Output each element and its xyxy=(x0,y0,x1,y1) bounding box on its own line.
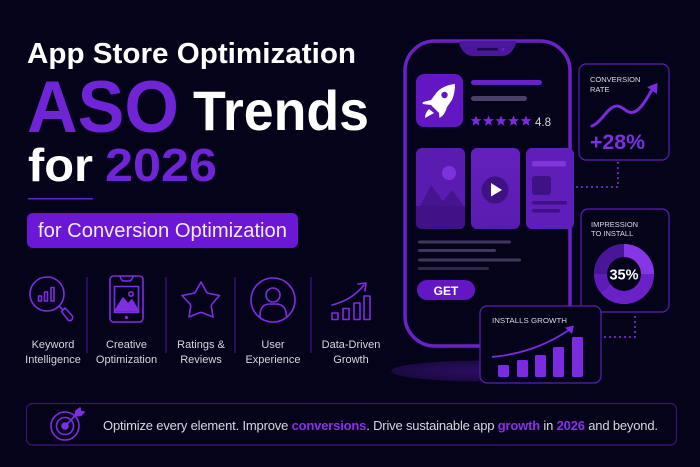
screenshot 2: video xyxy=(471,148,520,229)
feature: Ratings & Reviews xyxy=(177,282,226,366)
card heading: TO INSTALL xyxy=(591,229,633,238)
card: conversion rate xyxy=(579,64,669,160)
card heading: RATE xyxy=(590,85,609,94)
card heading: INSTALLS GROWTH xyxy=(492,316,567,325)
label: Intelligence xyxy=(25,354,81,366)
label: Optimization xyxy=(96,354,157,366)
phone mockup xyxy=(405,41,574,346)
label: Keyword xyxy=(32,339,74,351)
bar chart xyxy=(498,337,583,377)
card heading: IMPRESSION xyxy=(591,220,638,229)
donut chart xyxy=(600,250,648,298)
GET button xyxy=(417,280,475,300)
label: Creative xyxy=(106,339,147,351)
star rating xyxy=(470,116,551,129)
label: Growth xyxy=(333,354,369,366)
feature: Data-Driven Growth xyxy=(322,283,380,366)
app icon: rocket xyxy=(416,74,463,127)
title word: 2026: 2026 xyxy=(105,139,217,191)
phone notch xyxy=(459,41,516,56)
phone frame xyxy=(405,41,570,346)
subtitle pill: for Conversion Optimization xyxy=(38,220,287,242)
icon: phone with picture xyxy=(110,276,143,322)
connector: conversion card to phone xyxy=(575,162,618,187)
screenshot 3: layout xyxy=(526,148,574,229)
growth arrow xyxy=(492,326,574,357)
title word: for: for xyxy=(28,139,93,191)
card: installs growth xyxy=(480,306,601,383)
phone shadow xyxy=(391,360,573,382)
metric: +28% xyxy=(590,131,645,154)
donut value: 35% xyxy=(609,268,639,284)
label: Data-Driven xyxy=(322,339,380,351)
icon: user in circle xyxy=(251,278,295,322)
bottom banner xyxy=(26,404,676,445)
title block xyxy=(27,38,369,191)
tagline: Optimize every element. Improve conversions. Drive sustainable app growth in 2026 and beyond. xyxy=(103,418,658,433)
trend line with arrow xyxy=(592,83,658,126)
feature: Keyword Intelligence xyxy=(25,277,81,366)
description placeholder lines xyxy=(418,240,521,270)
card: impression to install xyxy=(581,209,669,312)
icon: rising bars and arrow xyxy=(332,283,370,320)
GET button: GET xyxy=(434,284,459,298)
label: User xyxy=(261,339,285,351)
star rating: 4.8 xyxy=(535,117,551,129)
icon: target with arrow xyxy=(51,408,84,440)
label: Experience xyxy=(245,354,301,366)
label: Reviews xyxy=(180,354,222,366)
card heading: CONVERSION xyxy=(590,75,640,84)
icon: magnifier with bars xyxy=(30,277,73,321)
screenshot 1: landscape xyxy=(416,148,465,229)
subtitle pill xyxy=(27,213,298,248)
title line: App Store Optimization: App Store Optimization xyxy=(27,38,356,70)
feature: Creative Optimization xyxy=(96,276,157,366)
app name placeholder lines xyxy=(471,80,542,101)
label: Ratings & xyxy=(177,339,226,351)
feature: User Experience xyxy=(245,278,301,366)
title word: ASO: ASO xyxy=(27,67,179,148)
connector: impression card to installs card xyxy=(602,316,635,337)
title word: Trends: Trends xyxy=(193,79,369,142)
icon: star outline xyxy=(182,282,220,317)
